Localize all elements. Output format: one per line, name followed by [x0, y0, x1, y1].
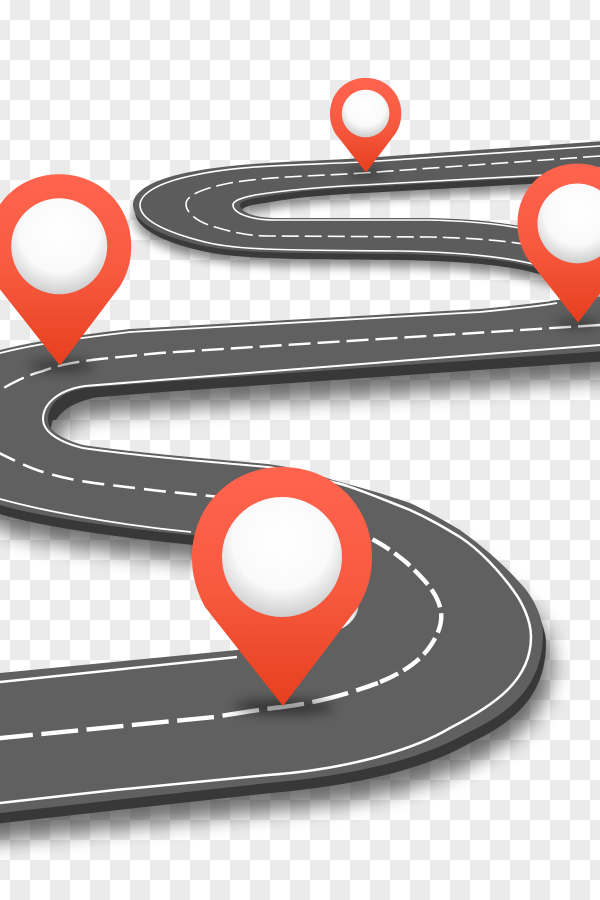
pin 2: contact shadow — [348, 170, 384, 176]
pin: front largest — [192, 467, 372, 706]
pin 4: contact shadow — [234, 700, 334, 714]
centre dashed lines — [0, 325, 600, 738]
upper hairpin road — [133, 140, 600, 303]
pin 3: contact shadow — [556, 320, 600, 326]
pin: right edge — [517, 164, 600, 322]
road edge lines — [0, 303, 600, 803]
pin: left large — [0, 174, 131, 366]
pin: top small — [330, 78, 401, 172]
pin 1: contact shadow — [30, 361, 94, 371]
main road: lower S-curve — [0, 295, 600, 845]
